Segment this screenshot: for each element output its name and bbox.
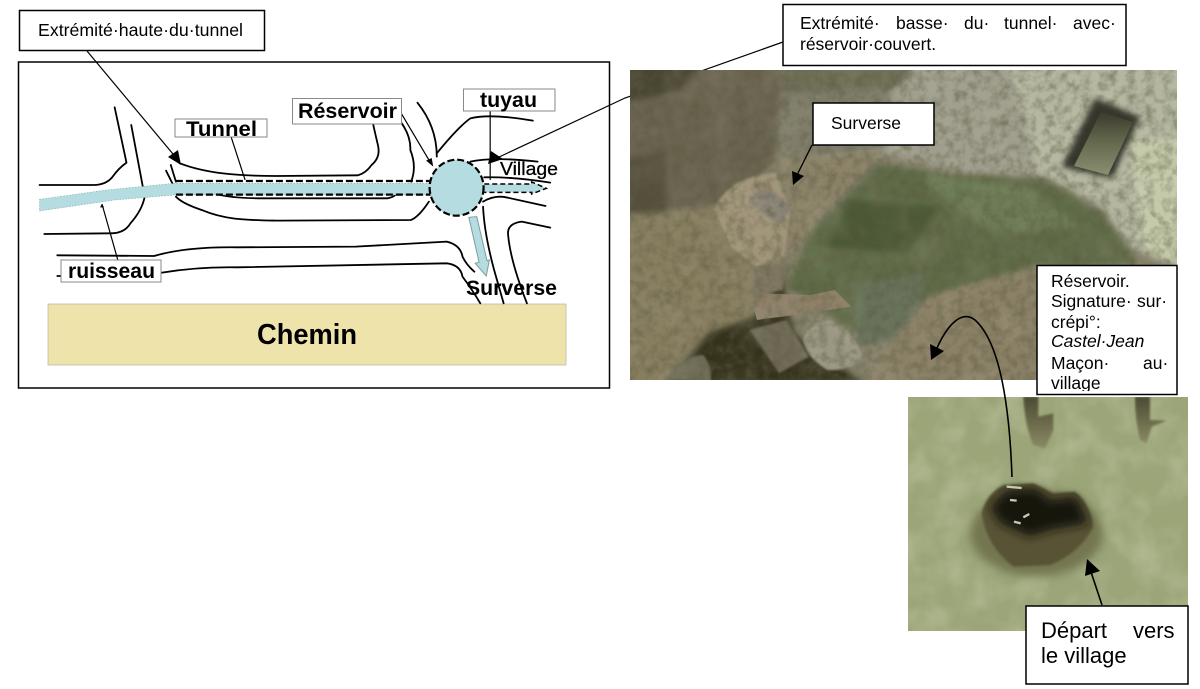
callout: Extrémité basse du tunnel [783,4,1126,66]
callout: Extrémité haute du tunnel: Extrémité·haute·du·tunnel [38,20,243,40]
label: tuyau: tuyau [480,89,537,112]
stream and tunnel water [40,181,546,211]
arrow: lower tunnel end to diagram [488,42,783,164]
hole [970,490,1103,577]
callout: Départ vers le village: Départ [1041,618,1107,643]
callout: Extrémité basse du tunnel: réservoir·couvert. [800,34,936,54]
right wall [779,63,1186,273]
callout: Réservoir signature: Signature· [1051,291,1132,311]
callout: Départ vers le village: vers [1133,618,1175,643]
overflow arrow [469,217,489,276]
arrow: Surverse [792,145,812,185]
callout: Extrémité basse du tunnel: tunnel· [1004,13,1058,33]
callout: Réservoir signature: Maçon· [1051,353,1109,373]
moss floor [786,163,1138,347]
callout: Extrémité basse du tunnel: basse· [896,13,949,33]
left wall [624,63,783,383]
callout: Surverse [813,103,934,145]
callout: Réservoir signature: village [1051,373,1101,393]
slanted wall face [782,150,883,168]
callout: Extrémité haute du tunnel [20,10,264,50]
callout: Départ vers le village: le village [1041,643,1127,668]
label: Tunnel: Tunnel [186,118,257,141]
chemin band [48,304,566,365]
terrain contour lines [40,103,550,303]
sandy floor [892,263,1044,341]
chemin band: Chemin [257,319,357,351]
callout: Extrémité basse du tunnel: du· [964,13,989,33]
label: Réservoir: Réservoir [298,100,397,123]
callout: Réservoir signature: Castel·Jean [1051,331,1144,351]
carved marks [1023,397,1167,448]
callout: Extrémité basse du tunnel: Extrémité· [800,13,880,33]
panel: tunnel diagram [18,62,610,388]
callout: Extrémité basse du tunnel: avec· [1073,13,1116,33]
label: ruisseau: ruisseau [68,260,155,283]
leader lines [100,111,490,260]
callout: Réservoir signature: Réservoir. [1051,271,1130,291]
arrow: Départ [1085,559,1102,605]
arrow: upper tunnel end [87,51,181,165]
label: tuyau [464,89,555,112]
callout: Départ vers le village [1026,606,1188,684]
label: Surverse: Surverse [466,277,557,300]
callout: Réservoir signature: sur· [1137,291,1167,311]
callout: Réservoir signature: crépi°: [1051,312,1101,332]
callout: Réservoir signature: au· [1143,353,1168,373]
stone spout [714,173,790,267]
label: Village: Village [500,159,558,179]
rubble at the base [666,263,864,383]
photo: reservoir interior [624,63,1186,383]
photo: mason's signature on plaster [908,397,1188,631]
callout: Réservoir signature [1037,266,1177,394]
callout: Surverse: Surverse [831,113,901,133]
reservoir circle [430,160,484,216]
wall niche [1062,98,1140,178]
arrow: signature to reservoir floor [930,317,1012,477]
